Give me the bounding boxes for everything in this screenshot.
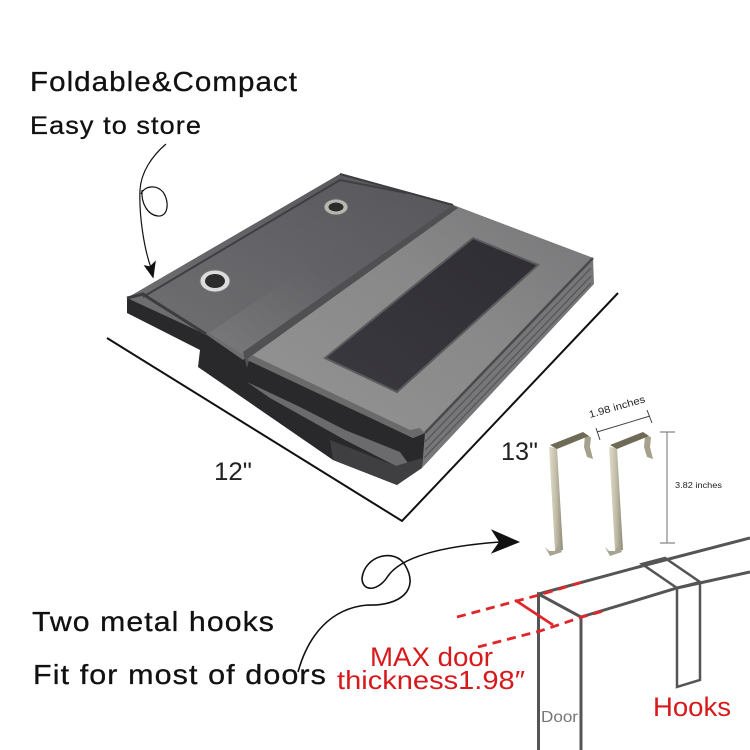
- label: door: Door: [541, 709, 579, 726]
- label: 12 inch: 12": [214, 458, 252, 486]
- label: max door thickness: MAX door: [370, 642, 493, 672]
- hook right: [605, 432, 653, 556]
- text: fit for most of doors: Fit for most of doors: [33, 659, 327, 690]
- curved arrow to hooks: [298, 531, 518, 672]
- label: 1.98 inches: 1.98 inches: [588, 394, 647, 421]
- foldable bag photo illustration: [127, 174, 594, 485]
- text: two metal hooks: Two metal hooks: [32, 606, 275, 637]
- door diagram: [538, 538, 750, 750]
- label: max door thickness: thickness1.98″: [337, 665, 525, 695]
- label: 3.82 inches: 3.82 inches: [675, 480, 722, 490]
- label: 13 inch: 13": [501, 438, 538, 466]
- label: hooks: Hooks: [653, 692, 731, 722]
- bag lower pleat: [247, 382, 408, 466]
- top flap: [127, 174, 453, 360]
- dimension line: 12 inch: [107, 293, 618, 521]
- dimension: hook height: [660, 432, 675, 543]
- bag dark underside silhouette: [127, 174, 593, 485]
- dark window: [325, 238, 538, 392]
- panel seam band: [243, 205, 458, 368]
- panel lower edge: [247, 355, 425, 438]
- eyelet left: [200, 270, 230, 292]
- max thickness dashed marker: [457, 581, 607, 647]
- bag bottom fold: [330, 440, 422, 485]
- curved arrow to bag: [140, 144, 167, 277]
- eyelet right: [324, 199, 348, 215]
- bag right side stripes: [422, 258, 594, 468]
- hook left: [545, 432, 593, 556]
- label: max door thickness: [337, 642, 525, 695]
- light front panel: [247, 205, 593, 438]
- subheading: easy to store: Easy to store: [30, 112, 202, 140]
- flap lower band: [209, 196, 445, 355]
- heading: foldable and compact: Foldable&Compact: [30, 66, 298, 97]
- dimension: hook spacing: [596, 410, 652, 440]
